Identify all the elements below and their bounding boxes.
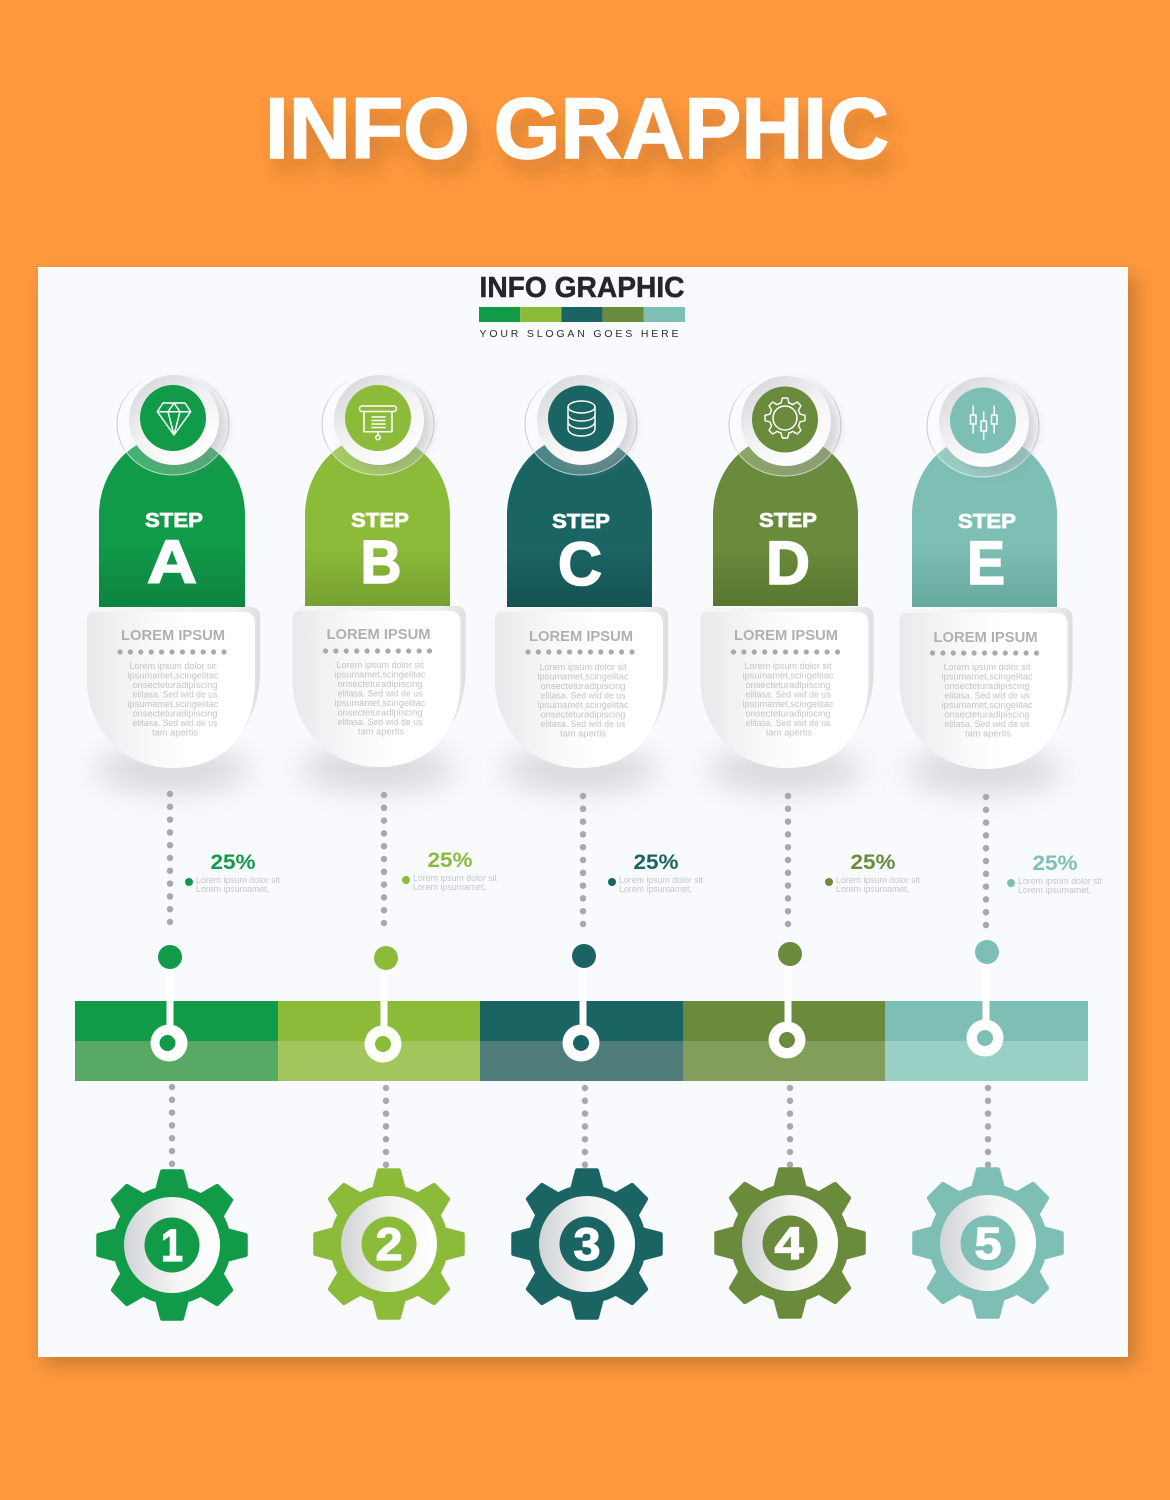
label STEP C: STEP	[552, 511, 610, 533]
card E: ipsumamet,scingelitac	[942, 700, 1033, 710]
card C: elitasa. Sed wid de us	[540, 719, 626, 729]
icon: gear	[765, 398, 805, 438]
dotted connectors above the bar	[170, 794, 986, 928]
panel: step D	[700, 374, 874, 792]
card D: ipsumamet,scingelitac	[742, 699, 834, 709]
card A: onsecteturadipiscing	[132, 708, 218, 718]
label STEP A	[145, 510, 203, 596]
badge B with presentation icon	[322, 373, 434, 475]
callout B: 25%: Lorem ipsum dolor sit	[413, 873, 497, 883]
card E: elitasa. Sed wid de us	[944, 719, 1030, 729]
label STEP C	[552, 511, 610, 598]
card A: LOREM IPSUM	[121, 627, 225, 644]
label STEP E	[958, 511, 1016, 597]
callout B: 25%: Lorem ipsumamet,	[413, 882, 486, 892]
label STEP A: A	[147, 528, 197, 596]
panel: step A	[87, 373, 260, 792]
tab A	[99, 435, 245, 607]
card C: tam apertis	[560, 728, 607, 738]
label STEP B: B	[360, 528, 402, 596]
label STEP E: STEP	[958, 511, 1016, 533]
card B: ipsumamet,scingelitac	[334, 670, 426, 680]
label STEP B	[351, 510, 409, 596]
gear 2	[316, 1171, 462, 1317]
tab D	[713, 435, 858, 606]
card A: tam apertis	[152, 728, 199, 738]
timeline marker A	[150, 945, 188, 1062]
tab B	[305, 435, 450, 606]
callout C: 25%: Lorem ipsum dolor sit	[619, 875, 703, 885]
main title: INFO GRAPHIC	[265, 81, 889, 177]
card D	[700, 607, 874, 792]
icon: candlesticks	[970, 406, 997, 439]
label STEP B: STEP	[351, 510, 409, 532]
label STEP D	[759, 510, 817, 597]
timeline marker E	[966, 940, 1004, 1056]
card A	[87, 607, 260, 792]
card B: Lorem ipsum dolor sit	[336, 660, 424, 670]
callout A: 25%	[185, 851, 280, 894]
panel: main sheet	[38, 267, 1136, 1365]
slogan: YOUR SLOGAN GOES HERE	[480, 328, 678, 340]
card B: tam apertis	[358, 726, 405, 736]
icon: presentation board	[360, 406, 396, 440]
callout E: 25%: Lorem ipsum dolor sit	[1018, 876, 1102, 886]
card A: ipsumamet,scingelitac	[128, 699, 219, 709]
card B: onsecteturadipiscing	[338, 708, 422, 718]
card A: onsecteturadipiscing	[132, 680, 218, 690]
card E: LOREM IPSUM	[934, 629, 1038, 646]
tab C	[507, 435, 652, 607]
gear 3	[514, 1171, 660, 1317]
badge C with database icon	[525, 373, 637, 475]
label STEP D: STEP	[759, 510, 817, 532]
card D: onsecteturadipiscing	[746, 708, 830, 718]
timeline marker B	[364, 946, 402, 1062]
callout C: 25%: Lorem ipsumamet,	[619, 884, 692, 894]
colour timeline bar	[75, 1001, 1088, 1081]
card C	[495, 607, 668, 792]
callout E: 25%: 25%	[1032, 852, 1078, 875]
callout E: 25%	[1007, 852, 1102, 895]
card D: ipsumamet,scingelitac	[742, 670, 834, 680]
card C: LOREM IPSUM	[529, 628, 633, 645]
callout C: 25%: 25%	[634, 851, 679, 874]
callout D: 25%	[825, 851, 920, 894]
card D: onsecteturadipiscing	[746, 680, 830, 690]
card E	[900, 608, 1072, 793]
gear 4	[717, 1170, 863, 1316]
callout B: 25%: 25%	[428, 849, 473, 872]
badge A with diamond icon	[117, 373, 229, 475]
card A: elitasa. Sed wid de us	[132, 690, 218, 700]
card D: Lorem ipsum dolor sit	[744, 661, 832, 671]
card D: LOREM IPSUM	[734, 627, 838, 644]
card A: ipsumamet,scingelitac	[128, 670, 219, 680]
card C: Lorem ipsum dolor sit	[540, 662, 627, 672]
gear 5	[915, 1170, 1061, 1316]
gear 3: 3	[574, 1219, 600, 1270]
card C: onsecteturadipiscing	[540, 681, 626, 691]
callout A: 25%: Lorem ipsumamet,	[196, 884, 269, 894]
gear 1	[99, 1172, 245, 1318]
gear 5: 5	[974, 1218, 1002, 1269]
card C: elitasa. Sed wid de us	[540, 690, 626, 700]
card C: ipsumamet,scingelitac	[538, 672, 629, 682]
header logo	[479, 272, 685, 340]
label STEP A: STEP	[145, 510, 203, 532]
callout D: 25%: 25%	[850, 851, 896, 874]
callout D: 25%: Lorem ipsum dolor sit	[836, 875, 920, 885]
card B: ipsumamet,scingelitac	[334, 698, 426, 708]
tab E	[912, 435, 1057, 607]
panel: step B	[292, 373, 466, 791]
card D: elitasa. Sed wid de us	[746, 690, 831, 700]
icon: diamond	[157, 403, 191, 435]
gear 2: 2	[376, 1219, 402, 1270]
gear 1: 1	[161, 1220, 183, 1271]
dotted connectors below the bar	[172, 1087, 988, 1167]
label STEP E: E	[967, 529, 1005, 597]
callout B: 25%	[402, 849, 497, 892]
card D: elitasa. Sed wid de us	[746, 718, 831, 728]
card E: onsecteturadipiscing	[944, 681, 1030, 691]
card E: elitasa. Sed wid de us	[944, 690, 1030, 700]
label STEP D: D	[766, 529, 810, 597]
callout A: 25%: 25%	[210, 851, 256, 874]
callout E: 25%: Lorem ipsumamet,	[1018, 885, 1091, 895]
card A: elitasa. Sed wid de us	[132, 718, 218, 728]
card B: elitasa. Sed wid de us	[338, 688, 423, 698]
card B	[292, 606, 466, 791]
callout C: 25%	[608, 851, 703, 894]
panel: step E	[900, 375, 1072, 793]
card A: Lorem ipsum dolor sir	[130, 661, 216, 671]
heading: info graphic: INFO GRAPHIC	[480, 272, 685, 304]
card E: Lorem ipsum dolor sit	[944, 662, 1031, 672]
colour strip	[479, 307, 685, 322]
card D: tam apertis	[766, 728, 813, 738]
card B: onsecteturadipiscing	[338, 679, 422, 689]
card B: elitasa. Sed wid de us	[338, 717, 423, 727]
callout A: 25%: Lorem ipsum dolor sit	[196, 875, 280, 885]
label STEP C: C	[558, 530, 602, 598]
timeline marker D	[768, 942, 806, 1058]
badge D with gear icon	[729, 374, 841, 476]
gear 4: 4	[774, 1218, 804, 1269]
card B: LOREM IPSUM	[326, 626, 430, 643]
timeline marker C	[562, 944, 600, 1062]
badge E with candlestick icon	[927, 375, 1039, 477]
card E: tam apertis	[965, 728, 1012, 738]
panel: step C	[495, 373, 668, 792]
card E: onsecteturadipiscing	[944, 710, 1030, 720]
card C: ipsumamet,scingelitac	[538, 700, 629, 710]
card E: ipsumamet,scingelitac	[942, 672, 1033, 682]
icon: database	[568, 401, 595, 436]
card C: onsecteturadipiscing	[540, 710, 626, 720]
callout D: 25%: Lorem ipsumamet,	[836, 884, 909, 894]
